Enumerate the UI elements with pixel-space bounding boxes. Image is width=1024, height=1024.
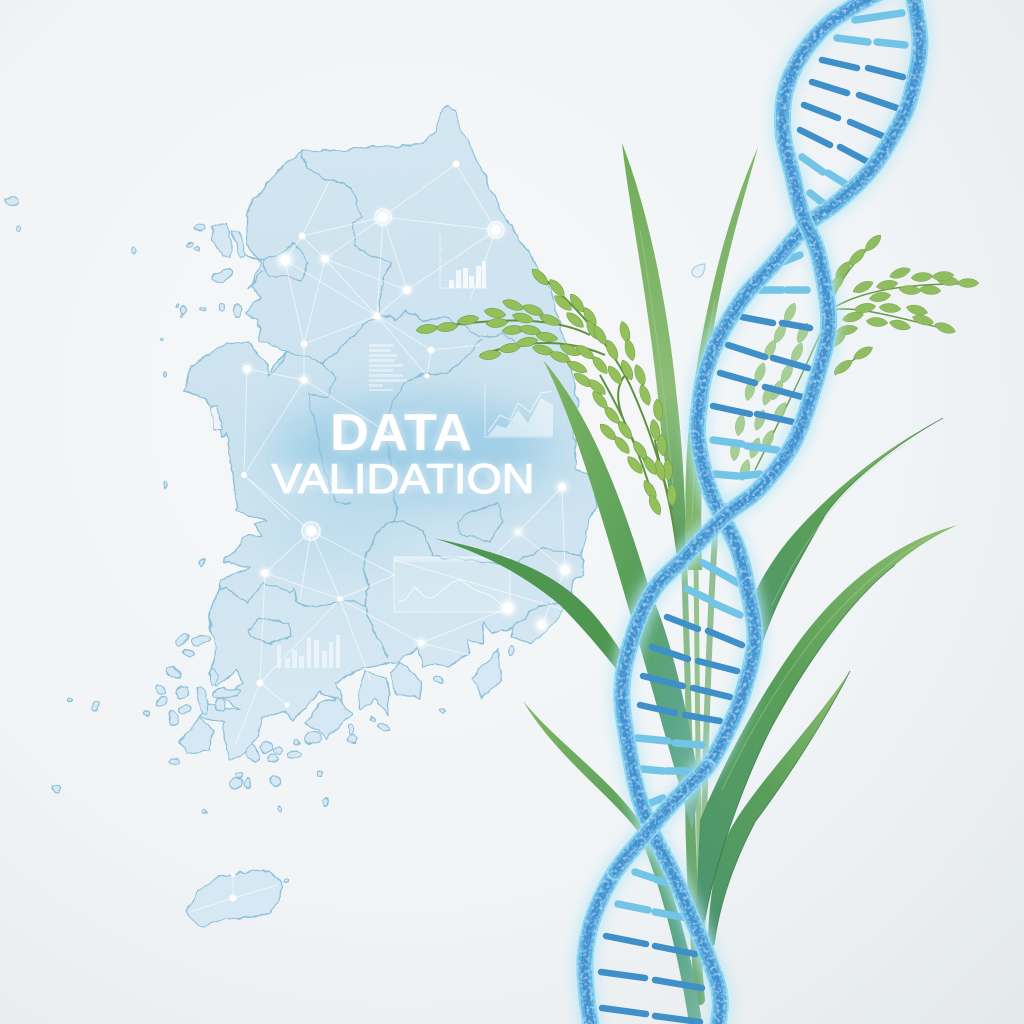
base pair rungs: bottom section (601, 844, 702, 1022)
rice panicle: right (730, 232, 979, 482)
title glow: DATA (333, 404, 469, 462)
strand A (585, 0, 920, 1024)
base pair rungs: lower section (637, 563, 742, 804)
leaf veins (640, 230, 930, 790)
rice plant (415, 143, 979, 1024)
leaf: right lower (708, 671, 850, 950)
mini chart: upper bars (440, 233, 489, 288)
leaf: mid left (543, 360, 700, 830)
mini chart: line panel (394, 557, 510, 612)
title glow (278, 404, 528, 502)
rice panicle: left (415, 266, 678, 560)
province borders (220, 150, 583, 657)
DNA double helix (585, 0, 920, 1024)
faded grains inside the helix (730, 301, 812, 482)
helix glow (585, 0, 920, 1024)
base pair rungs: middle section (713, 255, 810, 508)
leaf: right upper (750, 418, 943, 690)
network nodes (230, 160, 572, 902)
Taean inlet (210, 405, 222, 430)
strand B (622, 0, 880, 1024)
left panicle stems (418, 275, 678, 560)
leaf: top right (685, 147, 758, 570)
right panicle stems (755, 242, 970, 470)
map of South Korea (5, 105, 597, 926)
strand A lower crossing (615, 767, 707, 872)
right panicle grains (821, 232, 979, 377)
leaf: long left (433, 538, 632, 676)
leaf: low left (523, 701, 703, 1024)
title line 2: VALIDATION (272, 455, 534, 502)
mini chart: horizontal list (369, 344, 407, 391)
title: DATA VALIDATION (272, 404, 534, 502)
title glow: VALIDATION (278, 455, 528, 502)
mini chart: lower bars (277, 635, 340, 668)
node halos (242, 209, 572, 648)
center stems (684, 520, 716, 1000)
base pair rungs: top section (800, 13, 905, 210)
leaf: top left (622, 143, 686, 560)
network lines (190, 164, 565, 912)
node rings (302, 209, 504, 540)
leaf dark lower edges (705, 418, 943, 945)
leaf: right large (695, 525, 958, 935)
central glow (270, 400, 555, 560)
mini chart: area (485, 383, 553, 437)
water droplet (692, 264, 705, 277)
left panicle grains (415, 266, 676, 517)
title line 1: DATA (330, 404, 472, 462)
mainland (185, 105, 597, 760)
Jeju island (187, 870, 282, 926)
islands (5, 197, 515, 882)
